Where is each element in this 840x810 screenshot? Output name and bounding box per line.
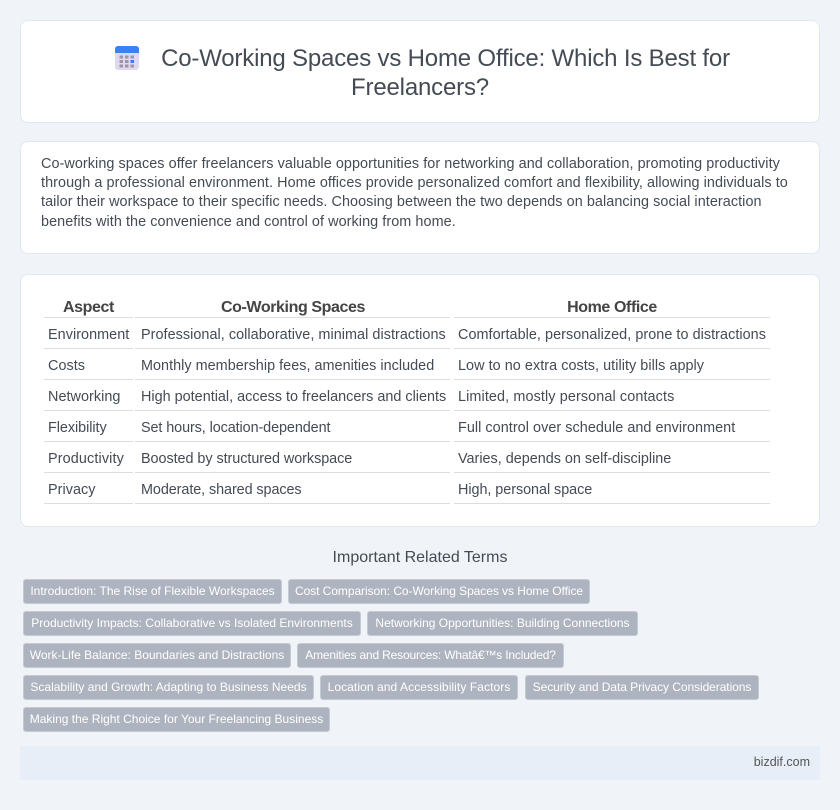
tag list: related terms: Introduction: The Rise of Flexible Workspaces xyxy=(30,584,275,598)
comparison table: Limited, mostly personal contacts xyxy=(458,389,674,405)
comparison table: Moderate, shared spaces xyxy=(141,482,302,498)
comparison table: Costs xyxy=(48,358,85,374)
footer xyxy=(20,746,820,780)
tag list: related terms: Making the Right Choice for Your Freelancing Business xyxy=(30,712,323,726)
comparison table: Home Office xyxy=(567,299,657,316)
tag list: related terms: Amenities and Resources: Whatâ€™s Included? xyxy=(305,648,556,662)
tag list: related terms: Productivity Impacts: Collaborative vs Isolated Environments xyxy=(31,616,353,630)
comparison table: Aspect xyxy=(63,299,114,316)
comparison table: Productivity xyxy=(48,451,124,467)
comparison table: High potential, access to freelancers and clients xyxy=(141,389,446,405)
comparison table: Privacy xyxy=(48,482,96,498)
comparison table: High, personal space xyxy=(458,482,592,498)
panel: title header xyxy=(20,20,820,123)
comparison table: Networking xyxy=(48,389,120,405)
comparison table: Low to no extra costs, utility bills apply xyxy=(458,358,704,374)
text block: introduction: Co-working spaces offer freelancers valuable opportunities for networking and collaboration, promoting productivity xyxy=(41,156,780,172)
tag list: related terms: Security and Data Privacy Considerations xyxy=(533,680,751,694)
text block: introduction xyxy=(41,156,788,230)
comparison table: Varies, depends on self-discipline xyxy=(458,451,671,467)
comparison table: Comfortable, personalized, prone to distractions xyxy=(458,327,766,343)
title xyxy=(161,45,730,101)
comparison table xyxy=(44,299,770,504)
text block: introduction: tailor their workspace to their specific needs. Choosing between the two depends on balancing social interaction xyxy=(41,194,762,210)
comparison table: Professional, collaborative, minimal distractions xyxy=(141,327,446,343)
tag list: related terms: Cost Comparison: Co-Working Spaces vs Home Office xyxy=(295,584,583,598)
comparison table: Boosted by structured workspace xyxy=(141,451,352,467)
tag list: related terms: Scalability and Growth: Adapting to Business Needs xyxy=(30,680,307,694)
title: Co-Working Spaces vs Home Office: Which Is Best for xyxy=(161,45,730,72)
text block: introduction: benefits with the convenience and control of working from home. xyxy=(41,214,456,230)
panel: comparison table xyxy=(20,274,820,527)
title: Freelancers? xyxy=(351,74,489,101)
footer: source credit: bizdif.com xyxy=(754,755,810,769)
tag list: related terms: Work-Life Balance: Boundaries and Distractions xyxy=(30,648,284,662)
comparison table: Environment xyxy=(48,327,129,343)
icon: calendar xyxy=(115,46,139,70)
comparison table: Flexibility xyxy=(48,420,107,436)
comparison table: Co-Working Spaces xyxy=(221,299,365,316)
heading: related terms: Important Related Terms xyxy=(333,549,507,566)
panel: introduction text xyxy=(20,141,820,254)
comparison table: Set hours, location-dependent xyxy=(141,420,330,436)
tag list: related terms: Location and Accessibility Factors xyxy=(328,680,510,694)
comparison table: Full control over schedule and environment xyxy=(458,420,735,436)
tag list: related terms xyxy=(23,579,759,732)
comparison table: Monthly membership fees, amenities included xyxy=(141,358,434,374)
text block: introduction: through a professional environment. Home offices provide personalized comfort and flexibility, allowing individuals to xyxy=(41,175,788,191)
tag list: related terms: Networking Opportunities: Building Connections xyxy=(375,616,630,630)
